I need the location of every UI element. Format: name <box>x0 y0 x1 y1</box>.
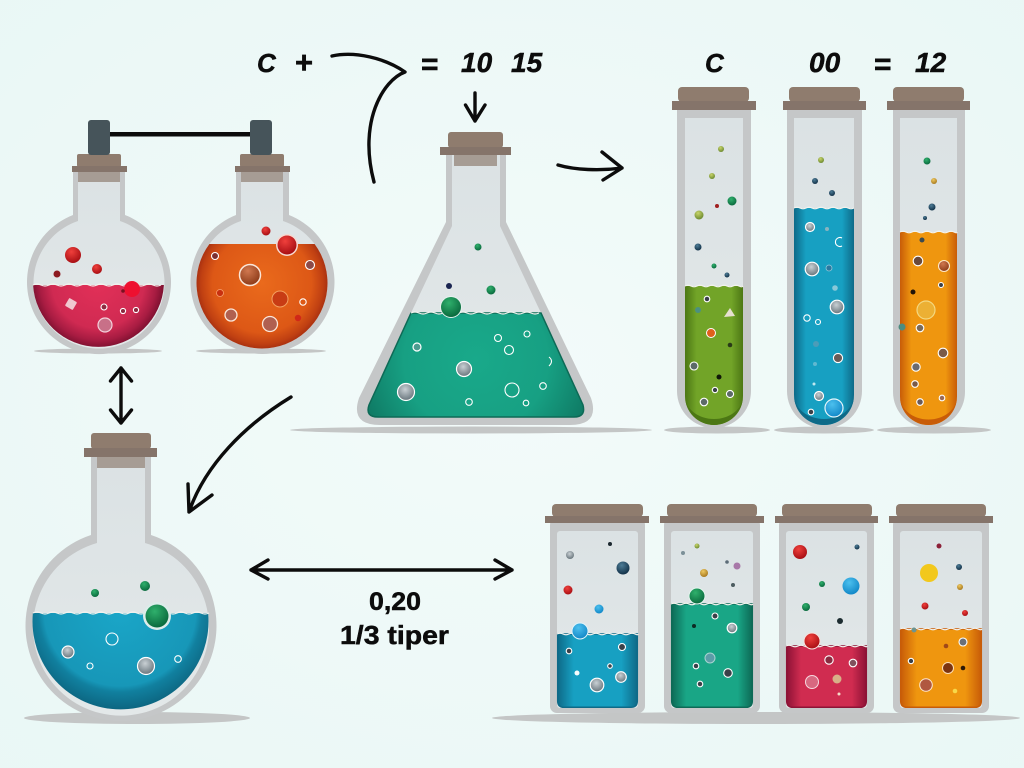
liquid: red jar <box>787 646 866 707</box>
equation top: 15 <box>511 47 543 78</box>
arrow: right to test tubes <box>558 152 622 180</box>
jar: blue <box>545 504 649 713</box>
test tube: orange <box>877 87 991 434</box>
round flask: orange <box>191 154 334 354</box>
connector tube between flasks <box>88 120 272 155</box>
bubbles: red jar <box>793 544 860 696</box>
conical flask: green <box>290 132 652 434</box>
liquid: blue jar <box>558 634 637 707</box>
equation top <box>257 45 543 81</box>
equation top: C <box>257 48 277 78</box>
bubbles: green tube <box>690 146 736 406</box>
arrow: curved to lower flask <box>188 397 291 512</box>
bubbles: conical flask <box>398 244 552 406</box>
label: dilution: 0,20 <box>369 588 421 616</box>
bubbles: blue tube <box>804 157 844 417</box>
jar: red <box>775 504 878 713</box>
liquid: green <box>368 313 584 417</box>
shelf shadow under jars <box>492 712 1020 724</box>
jar: green <box>660 504 764 713</box>
bubbles: green jar <box>681 544 740 687</box>
liquid: green tube <box>685 286 743 425</box>
equation over test tubes <box>705 47 947 81</box>
test tube: green <box>664 87 770 434</box>
bubbles: crimson flask <box>54 247 140 332</box>
liquid: blue flask <box>33 613 209 709</box>
label: dilution: 1/3 tiper <box>340 620 449 650</box>
equation top: + <box>295 45 313 80</box>
label: dilution <box>340 588 449 650</box>
jar: orange <box>889 504 993 713</box>
equation over test tubes: 12 <box>915 47 947 78</box>
bubbles: blue jar <box>564 542 630 692</box>
bubbles: blue flask <box>62 581 181 674</box>
bubbles: orange tube <box>898 158 950 405</box>
liquid: green jar <box>672 604 752 707</box>
arrow: down into conical flask <box>466 93 485 121</box>
equation top: = <box>421 48 439 81</box>
liquid: orange <box>197 244 328 349</box>
equation over test tubes: C <box>705 48 725 78</box>
equation over test tubes: = <box>874 48 892 81</box>
liquid: orange tube <box>900 232 957 425</box>
liquid: blue tube <box>794 208 854 425</box>
round flask: blue <box>24 433 250 724</box>
equation over test tubes: 00 <box>809 47 841 78</box>
arrow: double horizontal <box>251 560 512 579</box>
test tube: blue <box>774 87 874 434</box>
arrow: bracket curve <box>332 54 405 182</box>
arrow: double vertical <box>110 368 132 423</box>
equation top: 10 <box>461 47 493 78</box>
round flask: crimson <box>27 154 171 354</box>
bubbles: orange flask <box>212 226 314 332</box>
bubbles: orange jar <box>908 544 968 693</box>
liquid: orange jar <box>901 629 981 707</box>
liquid: crimson <box>33 285 164 347</box>
